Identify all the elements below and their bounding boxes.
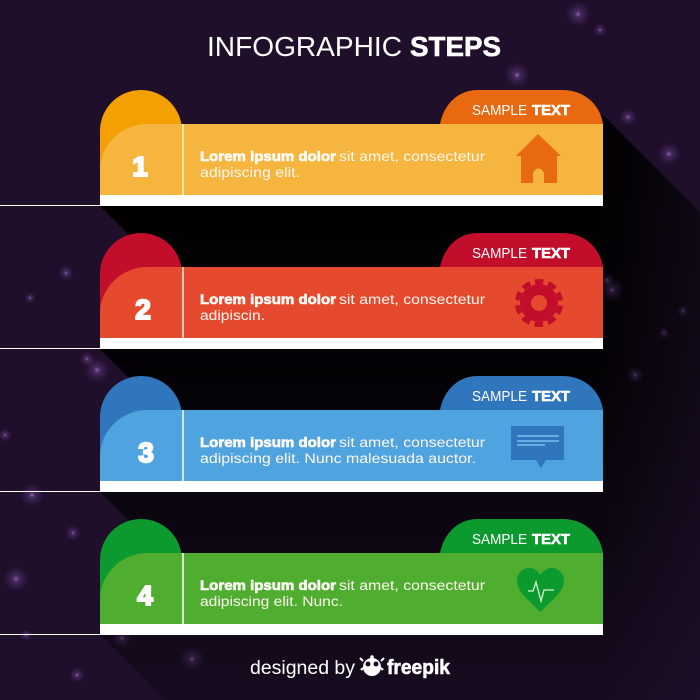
divider (182, 267, 184, 338)
tab label: SAMPLE (472, 532, 527, 548)
description: Lorem ipsum dolor (200, 149, 337, 164)
white underline (0, 624, 603, 635)
right tab (440, 376, 603, 410)
right tab (440, 519, 603, 553)
description: sit amet, consectetur (339, 435, 486, 450)
tab label: SAMPLE (472, 103, 527, 119)
step 1 panel (0, 90, 603, 206)
step 3 panel (0, 376, 603, 492)
tab label: SAMPLE (472, 246, 527, 262)
long shadow (100, 115, 700, 700)
number: 1 (132, 151, 148, 182)
description: sit amet, consectetur (339, 149, 486, 164)
step 2 panel (0, 233, 603, 349)
description: adipiscing elit. Nunc. (200, 594, 343, 609)
description: sit amet, consectetur (339, 578, 486, 593)
freepik: freepik (387, 657, 451, 679)
step 4 panel (0, 519, 603, 635)
icon: gear (514, 278, 564, 328)
right side shadow falloff (603, 115, 700, 700)
divider (182, 553, 184, 624)
number: 3 (138, 437, 154, 468)
title: INFOGRAPHIC (207, 31, 402, 62)
description: Lorem ipsum dolor (200, 435, 337, 450)
tab label: SAMPLE (472, 389, 527, 405)
description: Lorem ipsum dolor (200, 578, 337, 593)
body (100, 267, 603, 338)
description: adipiscin. (200, 308, 265, 323)
number: 4 (137, 580, 153, 611)
description: sit amet, consectetur (339, 292, 486, 307)
description: adipiscing elit. Nunc malesuada auctor. (200, 451, 476, 466)
divider (182, 124, 184, 195)
left tab (100, 90, 182, 195)
stars seen through the shadow (179, 272, 689, 672)
body (100, 410, 603, 481)
right tab (440, 90, 603, 124)
description: adipiscing elit. (200, 165, 300, 180)
icon: speech bubble (511, 426, 564, 468)
right tab (440, 233, 603, 267)
tab label: TEXT (532, 532, 570, 548)
tab label: TEXT (532, 246, 570, 262)
tab label: TEXT (532, 389, 570, 405)
left tab (100, 519, 182, 624)
divider (182, 410, 184, 481)
left tab (100, 233, 182, 338)
body (100, 124, 603, 195)
title: STEPS (410, 31, 501, 62)
icon: heart with pulse (517, 568, 564, 612)
description: Lorem ipsum dolor (200, 292, 337, 307)
footer credit (250, 655, 451, 679)
icon: house (516, 134, 561, 183)
body (100, 553, 603, 624)
white underline (0, 195, 603, 206)
icon: freepik mascot (360, 655, 384, 676)
tab label: TEXT (532, 103, 570, 119)
white underline (0, 338, 603, 349)
number: 2 (135, 294, 151, 325)
designed by: designed by (250, 658, 356, 679)
left tab (100, 376, 182, 481)
white underline (0, 481, 603, 492)
